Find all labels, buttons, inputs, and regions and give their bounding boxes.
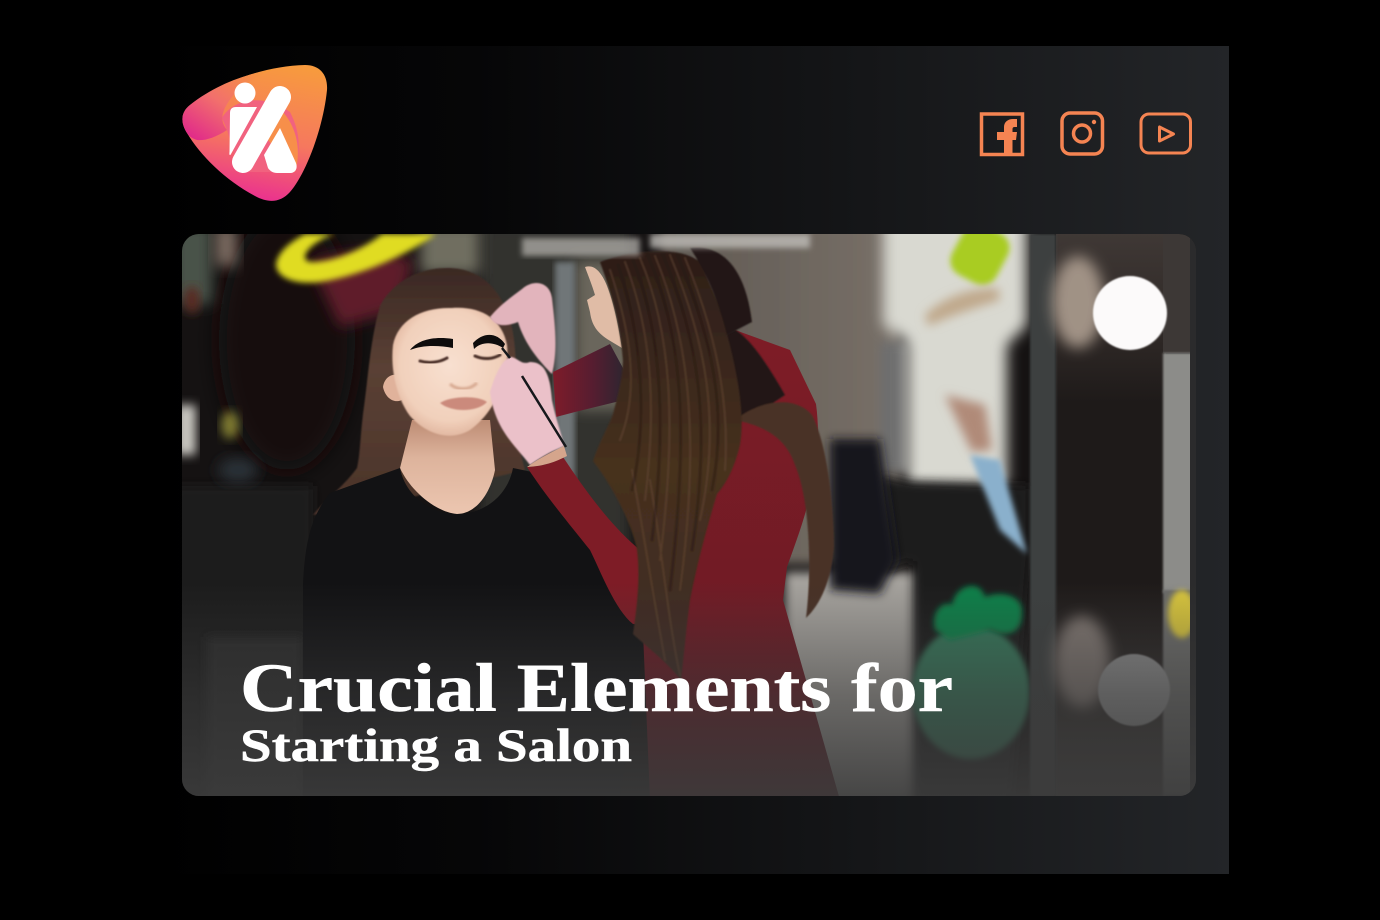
lower pink glove [490,357,564,465]
infographic canvas [182,46,1229,874]
green pineapple [912,586,1030,759]
background figure in white [830,214,1030,810]
wrist skin [527,446,567,467]
title [240,650,953,772]
hero photo [172,210,1196,812]
right eyebrow [473,335,505,349]
bottom gradient veil [182,594,1196,796]
beautician main hair [593,248,752,680]
nose [450,383,477,389]
closed eyes [420,355,500,362]
icon: facebook [982,114,1022,155]
lips [440,397,487,410]
client neck [400,420,495,514]
beautician forearm [527,457,650,625]
beautician back hair [725,325,834,618]
yellow ring [276,234,436,283]
photo backdrop [172,210,1196,812]
client face [383,308,507,436]
icon: instagram [1062,113,1102,154]
upper pink glove [490,283,555,374]
makeup brush [502,348,566,447]
background panel [151,46,1229,874]
client hair [313,268,525,515]
subtitle: Starting a Salon [240,720,632,772]
mirror column with lights [1030,234,1196,796]
left eyebrow [410,338,453,350]
blurred salon sign [522,234,810,256]
client sweater [303,468,614,693]
icon: video play [1141,114,1190,153]
beautician upper arm [553,344,624,417]
beautician face [585,266,622,348]
logo [182,65,327,201]
beautician dress [527,330,840,800]
title: Crucial Elements for [240,650,953,726]
